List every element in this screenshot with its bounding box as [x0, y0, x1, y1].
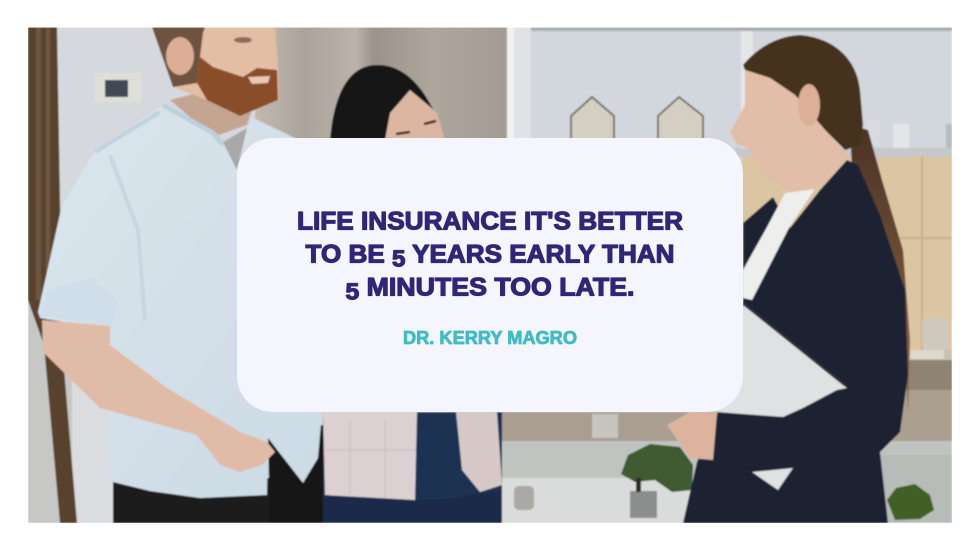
quote text: 5 [392, 246, 406, 272]
woman in the middle [323, 65, 502, 523]
quote text: MINUTES TOO LATE. [359, 274, 634, 302]
woman with documents [667, 35, 910, 523]
potted plants and jar [514, 318, 948, 520]
quote text: LIFE INSURANCE IT'S BETTER [297, 208, 683, 236]
quote text: 5 [346, 278, 359, 304]
quote card [237, 138, 743, 412]
author: DR. KERRY MAGRO [403, 328, 577, 348]
man [38, 27, 330, 523]
curtain [28, 27, 77, 523]
wall switch [96, 74, 140, 101]
quote text: YEARS EARLY THAN [405, 240, 674, 268]
shelf ornaments [571, 97, 952, 148]
quote text [297, 208, 683, 304]
quote text: TO BE [306, 240, 381, 268]
